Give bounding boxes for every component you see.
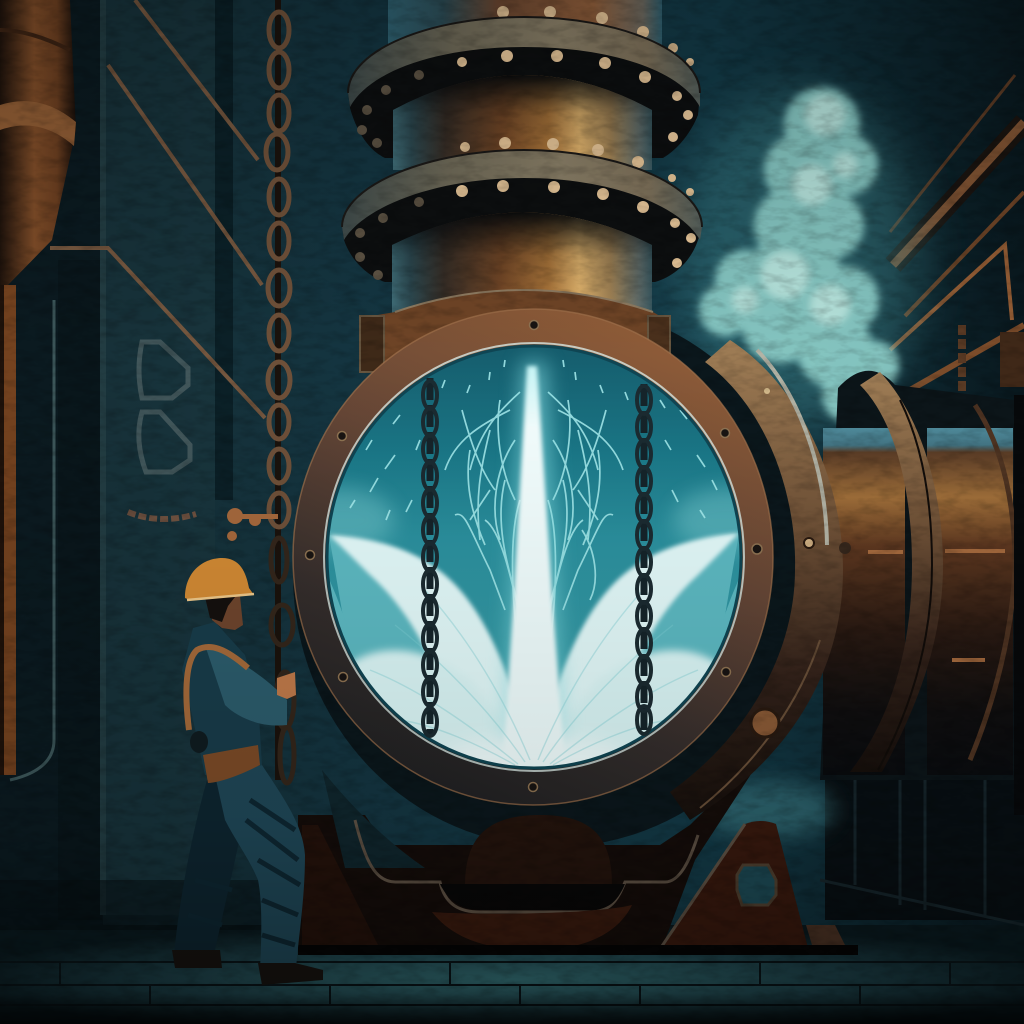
under-arc teal left: [330, 536, 426, 662]
pipe sections: [823, 428, 1013, 775]
central jet glow: [502, 362, 566, 775]
base rail: [355, 820, 698, 912]
upper flange bolts top: [497, 6, 694, 66]
left water arc: [330, 532, 510, 736]
lower right wash: [720, 582, 738, 646]
window chain left: [423, 378, 437, 736]
middle flange: [850, 372, 943, 772]
base centre dome: [465, 815, 612, 885]
hanging chain: [266, 0, 294, 783]
lower left wash: [330, 581, 348, 646]
pipe straps: [868, 551, 1005, 660]
low mist: [705, 782, 835, 838]
lower left foam: [353, 644, 482, 752]
base right pedestal: [662, 821, 808, 948]
worker head: [212, 596, 243, 630]
worker boots: [172, 950, 323, 985]
worker hair: [205, 597, 235, 622]
chain bracket: [227, 508, 278, 541]
base left triangle: [302, 825, 378, 945]
vertical copper column: [342, 0, 702, 320]
worker harness: [186, 647, 248, 730]
housing bolt: [751, 709, 779, 737]
glass window with water: [328, 348, 740, 766]
bottom glow: [452, 730, 616, 764]
collar above ring: [360, 290, 670, 372]
right wall lower panels: [820, 750, 1024, 925]
lower flange underside: [342, 150, 702, 282]
base bowl: [432, 905, 632, 950]
lower flange bolts: [355, 180, 696, 280]
base shadow: [298, 945, 858, 955]
right water arc: [557, 530, 738, 737]
column top segment: [388, 0, 662, 60]
left copper pipe: [0, 0, 76, 775]
window rim: [324, 343, 744, 771]
wall handles: [128, 342, 196, 519]
pedestal foot: [806, 925, 845, 945]
worker belt pouch: [190, 731, 208, 753]
worker back leg: [174, 780, 250, 955]
leg fold shadows: [188, 800, 300, 945]
lower right foam: [584, 644, 715, 752]
window chain right: [637, 384, 651, 734]
right background pipes: [890, 75, 1024, 395]
side glow right: [668, 480, 740, 558]
worker glove: [277, 672, 296, 699]
right horizontal pipe: [820, 371, 1024, 815]
steam: [699, 87, 899, 423]
column middle segment: [393, 75, 652, 170]
rear housing: [293, 303, 817, 847]
spray streaks: [349, 360, 718, 628]
upper flange bolts: [357, 50, 693, 148]
worker arm: [205, 645, 287, 726]
central jet: [504, 362, 564, 750]
column lower segment: [392, 212, 652, 320]
left wall panels: [0, 0, 300, 930]
housing left lower panel: [322, 770, 425, 868]
upper flange band: [348, 17, 700, 107]
pedestal hole: [737, 865, 776, 905]
right edge shadow: [1014, 395, 1024, 815]
side glow left: [328, 480, 400, 558]
base trough: [440, 884, 625, 910]
pedestal rim line: [662, 824, 745, 946]
under-arc teal right: [640, 534, 738, 662]
dark pipe backing: [820, 371, 1015, 780]
lower flange band: [342, 150, 702, 240]
worker hard hat: [185, 558, 254, 600]
rear flange crescent: [670, 340, 851, 820]
worker tool belt: [203, 745, 260, 783]
base body: [298, 745, 770, 948]
main ring: [293, 309, 773, 805]
worker torso: [182, 622, 262, 775]
fan strokes: [370, 590, 698, 765]
steam haze: [680, 90, 920, 430]
worker front leg: [215, 765, 305, 970]
base stand: [298, 745, 858, 955]
worker: [172, 558, 323, 985]
end flange: [970, 405, 1015, 760]
floor: [0, 925, 1024, 1024]
lower flange bolts top: [460, 137, 694, 196]
upper flange underside: [348, 17, 700, 158]
